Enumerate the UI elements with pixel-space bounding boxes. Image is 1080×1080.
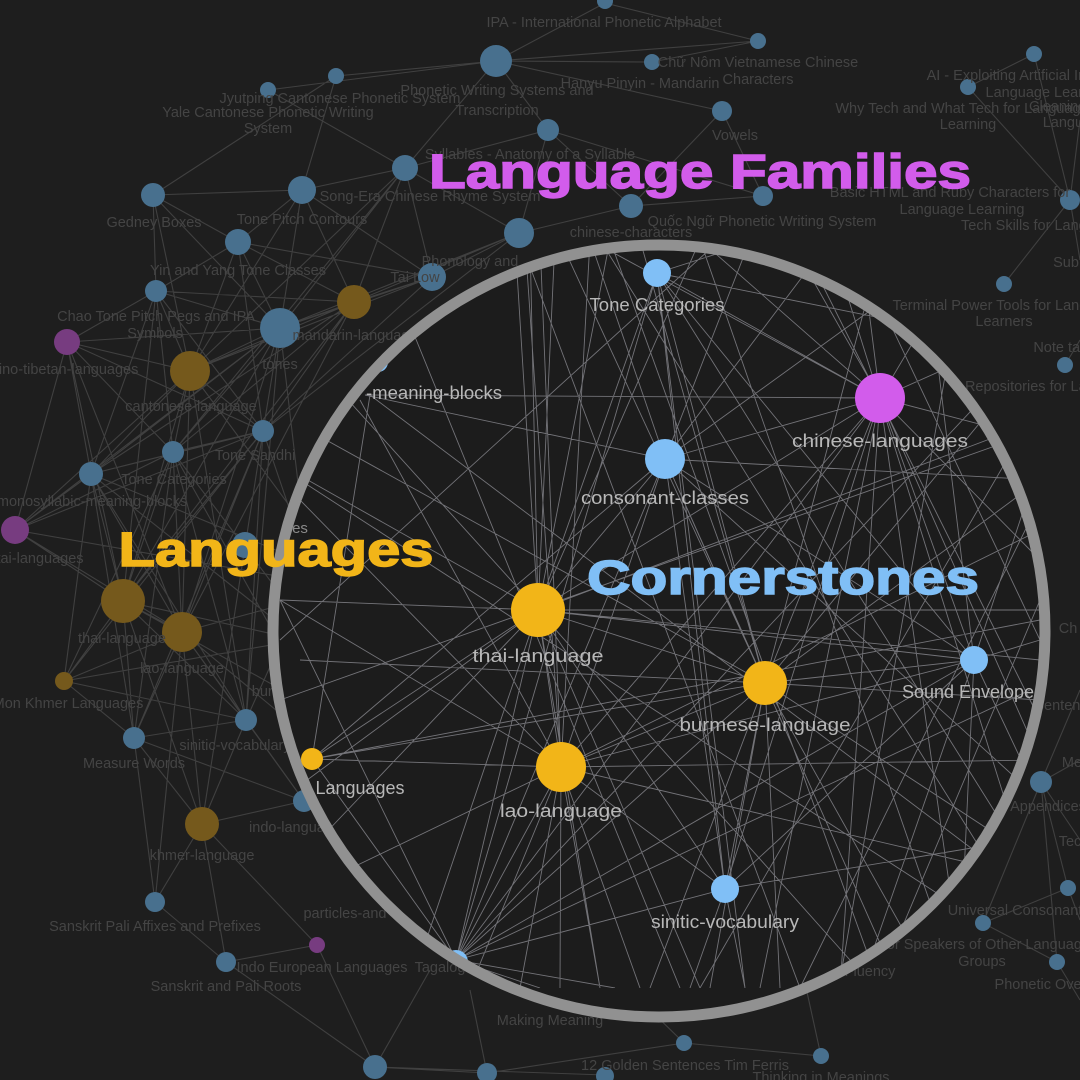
node: Languages: Languages	[316, 777, 404, 798]
label: meaning blocks: -meaning-blocks	[366, 382, 502, 403]
background graph labels: indo-language	[249, 820, 341, 836]
background graph labels: Phonology and	[422, 254, 518, 270]
node: lao-language	[500, 742, 622, 821]
node: chinese-languages	[792, 373, 968, 451]
background graph labels: Symbols	[127, 326, 183, 342]
node: consonant-classes: consonant-classes	[581, 487, 749, 508]
background graph labels: burmese	[252, 684, 308, 700]
background graph labels: Syllables - Anatomy of a Syllable	[425, 147, 635, 163]
background graph labels: Tagalog	[415, 960, 465, 976]
node: thai-language: thai-language	[472, 645, 604, 666]
node: Tone Categories: Tone Categories	[590, 294, 724, 315]
background graph labels: khmer-language	[150, 848, 254, 864]
background graph labels: Sanskrit and Pali Roots	[151, 979, 301, 995]
background graph labels: Vowels	[712, 128, 758, 144]
background graph labels: Learners	[975, 314, 1033, 330]
background graph labels: Characters	[723, 72, 793, 88]
background graph labels: Tone Categories	[121, 472, 227, 488]
background graph labels: monosyllabic-meaning-blocks	[0, 494, 187, 510]
background graph labels: Chữ Nôm Vietnamese Chinese	[658, 55, 858, 71]
node: Tone Categories	[590, 259, 724, 315]
node: Languages	[301, 748, 404, 798]
background graph labels: mandarin-language	[293, 328, 417, 344]
background graph labels: cantonese-language	[125, 399, 257, 415]
background graph labels: Universal Consonant	[948, 903, 1080, 919]
lens ring	[273, 245, 1045, 1017]
background graph labels: particles-and	[303, 906, 387, 922]
background graph labels: Fluency	[845, 964, 896, 980]
background graph labels: Language Learning	[900, 202, 1024, 218]
background graph labels: 12 Golden Sentences Tim Ferris	[581, 1058, 789, 1074]
background graph labels: Hanyu Pinyin - Mandarin	[561, 76, 719, 92]
partly hidden lens nodes	[380, 364, 468, 960]
lens graph edges	[280, 240, 1040, 988]
heading: Cornerstones: Cornerstones	[587, 552, 979, 605]
background graph labels: Ch	[1059, 621, 1077, 637]
node: lao-language: lao-language	[500, 800, 622, 821]
heading: Languages: Languages	[118, 524, 434, 577]
background graph labels: tones	[262, 357, 298, 373]
background graph labels: System	[244, 121, 292, 137]
background graph labels: Sub	[1053, 255, 1079, 271]
node: burmese-language: burmese-language	[680, 714, 850, 735]
magnifying lens background	[273, 245, 1045, 1017]
node: thai-language	[472, 583, 604, 666]
lens nodes and labels: es	[292, 520, 308, 537]
background graph labels: Quốc Ngữ Phonetic Writing System	[648, 214, 876, 230]
node: sinitic-vocabulary: sinitic-vocabulary	[651, 911, 800, 932]
node: chinese-languages: chinese-languages	[792, 430, 968, 451]
lens nodes and labels	[292, 259, 1034, 932]
background graph labels: Tai Low	[390, 270, 440, 286]
node: consonant-classes	[581, 439, 749, 508]
background graph labels: Groups	[958, 954, 1006, 970]
background graph labels: Yin and Yang Tone Classes	[150, 263, 326, 279]
node: burmese-language	[680, 661, 850, 735]
heading: Language Families: Language Families	[429, 146, 971, 199]
node: Sound Envelope: Sound Envelope	[902, 681, 1034, 702]
background graph labels: Indo European Languages	[237, 960, 407, 976]
background graph labels: Song-Era Chinese Rhyme System	[320, 189, 540, 205]
background graph labels: lao-language	[140, 661, 224, 677]
background graph labels: thai-language	[78, 631, 166, 647]
background graph labels: sinitic-vocabulary	[179, 738, 291, 754]
background graph labels: Measure Words	[83, 756, 185, 772]
background graph labels: Transcription	[455, 103, 539, 119]
background graph labels: Chao Tone Pitch Pegs and IPA	[57, 309, 255, 325]
background graph labels: Gedney Boxes	[106, 215, 202, 231]
background graph labels: Tone Pitch Contours	[237, 212, 367, 228]
background graph labels: Making Meaning	[497, 1013, 603, 1029]
background graph labels: Phonetic Writing Systems and	[400, 83, 594, 99]
background graph labels: Sanskrit Pali Affixes and Prefixes	[49, 919, 261, 935]
background graph labels: Tone Sandhi	[215, 448, 295, 464]
background graph labels: Jyutping Cantonese Phonetic System	[220, 91, 460, 107]
background graph labels: IPA - International Phonetic Alphabet	[486, 15, 722, 31]
background graph labels: Yale Cantonese Phonetic Writing	[162, 105, 374, 121]
background graph labels: chinese-characters	[570, 225, 692, 241]
node: sinitic-vocabulary	[651, 875, 800, 932]
background graph labels: Learning	[940, 117, 996, 133]
background graph labels: Basic HTML and Ruby Characters for	[830, 185, 1070, 201]
node: Sound Envelope	[902, 646, 1034, 702]
